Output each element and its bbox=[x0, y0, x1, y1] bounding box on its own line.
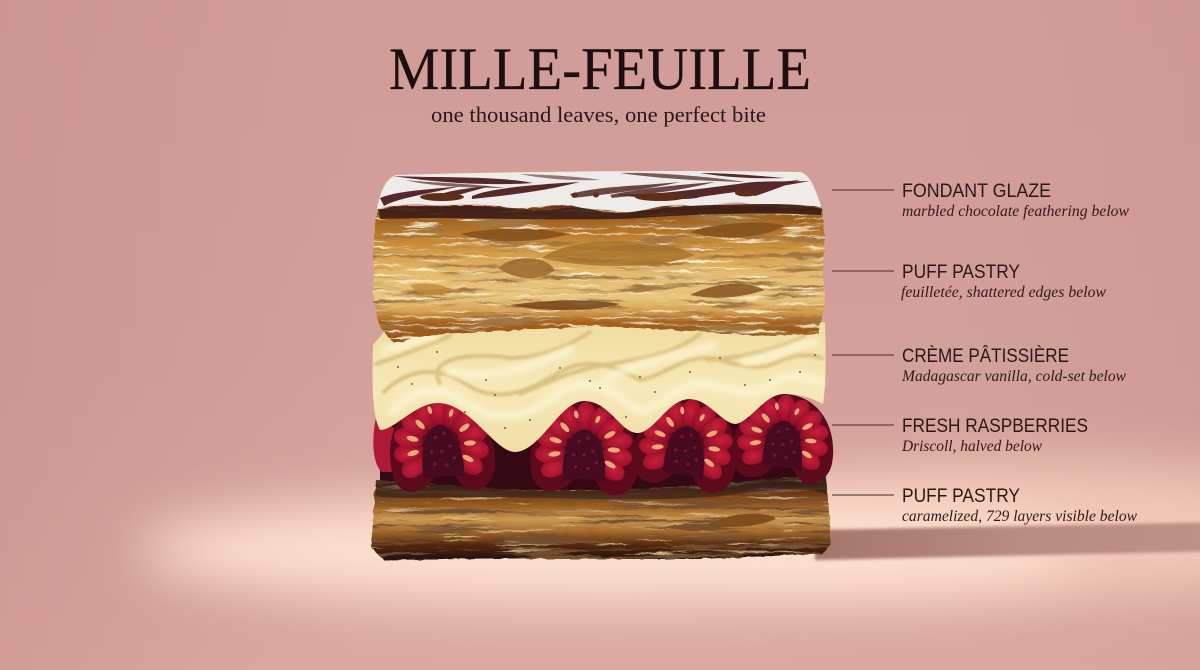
pastry illustration bbox=[371, 171, 835, 560]
cast shadow bbox=[815, 522, 1200, 560]
label: fondant glaze bbox=[832, 181, 1130, 220]
label: puff pastry caramelized: caramelized, 729 layers visible below bbox=[902, 508, 1138, 525]
label: creme patissiere: Madagascar vanilla, cold-set below bbox=[901, 368, 1127, 385]
label: fresh raspberries: FRESH RASPBERRIES bbox=[902, 416, 1088, 437]
title: MILLE-FEUILLE bbox=[389, 36, 811, 102]
subtitle: one thousand leaves, one perfect bite bbox=[431, 102, 766, 127]
label: creme patissiere: CRÈME PÂTISSIÈRE bbox=[902, 345, 1069, 367]
label: fondant glaze: marbled chocolate feathering below bbox=[902, 203, 1130, 220]
label: creme patissiere bbox=[832, 345, 1127, 385]
fondant glaze layer bbox=[377, 171, 822, 219]
creme patissiere layer bbox=[373, 322, 826, 452]
bottom puff pastry layer bbox=[371, 475, 831, 560]
label: puff pastry caramelized: PUFF PASTRY bbox=[902, 486, 1020, 507]
label: puff pastry: PUFF PASTRY bbox=[902, 262, 1020, 283]
label: puff pastry bbox=[832, 262, 1107, 301]
label: fresh raspberries bbox=[832, 416, 1088, 455]
upper puff pastry layer bbox=[373, 206, 825, 343]
raspberries layer bbox=[373, 390, 835, 499]
dark gap behind raspberries bbox=[380, 415, 822, 490]
label: fondant glaze: FONDANT GLAZE bbox=[902, 181, 1051, 202]
label: fresh raspberries: Driscoll, halved below bbox=[901, 438, 1043, 455]
label: puff pastry caramelized bbox=[832, 486, 1138, 525]
label: puff pastry: feuilletée, shattered edges below bbox=[901, 284, 1107, 301]
